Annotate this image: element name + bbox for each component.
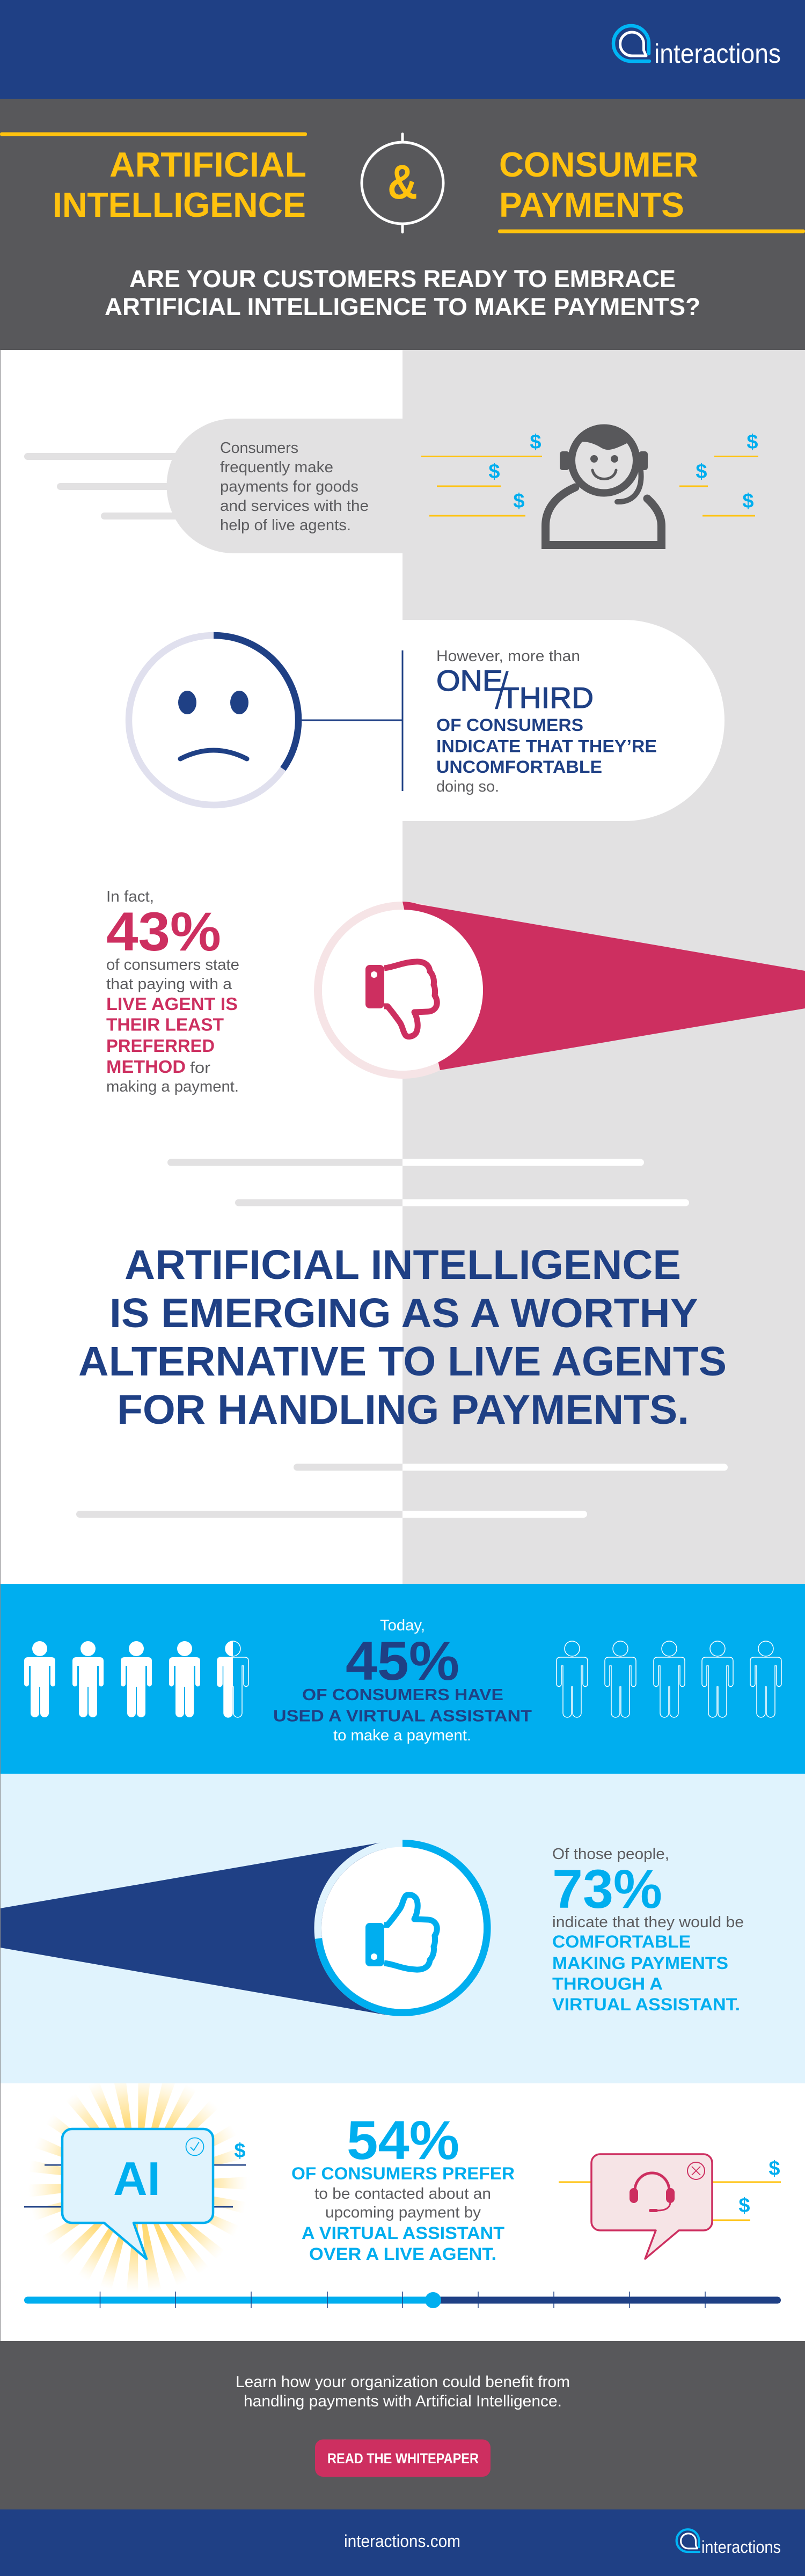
headline: AI as worthy alternative: FOR HANDLING PAYMENTS. [117, 1387, 689, 1433]
title: artificial intelligence: INTELLIGENCE [53, 185, 306, 224]
text: 43 percent: for [190, 1059, 210, 1077]
icon: live agent with headset [545, 427, 661, 545]
text: 54 percent: OF CONSUMERS PREFER [291, 2164, 515, 2183]
top header band [0, 0, 805, 99]
text: 54 percent: upcoming payment by [325, 2204, 481, 2221]
text: however more than one third: THIRD [501, 681, 594, 714]
text: 54 percent: to be contacted about an [314, 2185, 491, 2202]
website link: interactions.com [344, 2531, 460, 2551]
text: consumers frequently make payments: payments for goods [220, 478, 358, 495]
text: 43 percent: METHOD [106, 1057, 186, 1077]
text: 43 percent: of consumers state [106, 956, 239, 974]
text: 73 percent: VIRTUAL ASSISTANT. [552, 1995, 740, 2014]
text: 54 percent: A VIRTUAL ASSISTANT [302, 2223, 504, 2243]
text: consumers frequently make payments: and services with the [220, 497, 369, 515]
text: however more than one third: UNCOMFORTABLE [436, 757, 602, 777]
subtitle question: ARE YOUR CUSTOMERS READY TO EMBRACE [129, 265, 676, 292]
title band [0, 99, 805, 350]
text: 45 percent: USED A VIRTUAL ASSISTANT [273, 1707, 532, 1725]
subtitle question: ARTIFICIAL INTELLIGENCE TO MAKE PAYMENTS? [105, 293, 700, 320]
title: artificial intelligence: ARTIFICIAL [109, 145, 306, 184]
text: learn how: handling payments with Artificial Intelligence. [244, 2392, 562, 2410]
logo: interactions: interactions [654, 39, 781, 69]
right yellow rule [498, 230, 805, 233]
bottom footer band [0, 2509, 805, 2576]
title: consumer payments: PAYMENTS [499, 185, 684, 224]
icon: AI speech bubble [24, 2129, 246, 2259]
logo: interactions small: interactions [701, 2537, 781, 2557]
icon: sad face with progress ring [129, 635, 298, 805]
text: 45 percent: Today, [380, 1617, 425, 1634]
text: however more than one third: OF CONSUMERS [436, 715, 583, 735]
title: consumer payments: CONSUMER [499, 145, 698, 184]
text: 43 percent: THEIR LEAST [106, 1014, 224, 1035]
text: consumers frequently make payments [220, 440, 369, 534]
text: however more than one third: doing so. [436, 778, 499, 795]
logo: interactions small [677, 2529, 781, 2557]
dollar signs: $ [696, 460, 707, 483]
icon: thumbs up in cone [0, 1842, 487, 2015]
text: 73 percent [552, 1846, 744, 2014]
text: 73 percent: THROUGH A [552, 1974, 663, 1993]
connector lines [302, 650, 404, 791]
icon row: filled people [24, 1641, 248, 1717]
dollar signs: $ [530, 431, 541, 453]
text: learn how: Learn how your organization could benefit from [236, 2373, 570, 2391]
text: 73 percent: MAKING PAYMENTS [552, 1953, 728, 1973]
icon: thumbs down in cone [318, 902, 805, 1074]
text: 43 percent [106, 888, 239, 1095]
panel: 73 percent comfortable [0, 1774, 805, 2083]
headline: AI as worthy alternative: ARTIFICIAL INTELLIGENCE [125, 1242, 681, 1288]
dollar signs: $ [488, 460, 500, 483]
headline: AI as worthy alternative: IS EMERGING AS A WORTHY [109, 1290, 698, 1336]
panel: sunburst backdrop for AI bubble [33, 2083, 243, 2288]
icon: live agent speech bubble: $ [769, 2157, 780, 2180]
text: 73 percent: indicate that they would be [552, 1914, 744, 1931]
text: 43 percent: making a payment. [106, 1078, 239, 1095]
title: artificial intelligence [53, 145, 306, 224]
headline: AI as worthy alternative: ALTERNATIVE TO LIVE AGENTS [78, 1338, 727, 1385]
text: learn how [236, 2373, 570, 2410]
text: 43 percent: PREFERRED [106, 1036, 215, 1056]
text: however more than one third: However, more than [436, 648, 580, 665]
text: 45 percent: to make a payment. [333, 1727, 471, 1744]
dollar signs [488, 431, 758, 513]
icon: live agent speech bubble: $ [738, 2194, 750, 2217]
dollar signs: $ [742, 490, 754, 513]
text: 43 percent: LIVE AGENT IS [106, 994, 238, 1014]
text: 45 percent: 45% [346, 1630, 459, 1692]
left yellow rule [0, 132, 307, 136]
text: however more than one third [436, 648, 657, 795]
text: 73 percent: 73% [552, 1858, 662, 1920]
text: however more than one third: INDICATE THAT THEY’RE [436, 736, 657, 756]
button: read the whitepaper [315, 2440, 491, 2477]
icon: live agent speech bubble [559, 2154, 781, 2259]
yellow payment lines [421, 456, 758, 516]
panel: 54 percent prefer virtual assistant [24, 2110, 781, 2308]
progress slider [24, 2292, 781, 2308]
speed lines [24, 453, 187, 519]
horizontal bars below headline [76, 1464, 728, 1518]
split background panel [0, 350, 805, 1584]
icon: AI speech bubble: $ [234, 2140, 246, 2162]
text: 45 percent [273, 1617, 532, 1744]
text: consumers frequently make payments: help of live agents. [220, 517, 351, 534]
text: 73 percent: Of those people, [552, 1846, 669, 1863]
text: 54 percent: OVER A LIVE AGENT. [309, 2244, 496, 2264]
panel: one third uncomfortable [129, 620, 724, 821]
panel: 45 percent used virtual assistant [0, 1584, 805, 1774]
ampersand badge: & [387, 156, 418, 209]
horizontal bars above headline [167, 1159, 689, 1206]
logo: interactions [613, 26, 781, 69]
title: consumer payments [499, 145, 698, 224]
text: 73 percent: COMFORTABLE [552, 1932, 691, 1951]
button: read the whitepaper: READ THE WHITEPAPER [327, 2450, 479, 2467]
text: 43 percent: that paying with a [106, 976, 232, 993]
text: 54 percent [291, 2110, 515, 2264]
text: 54 percent: 54% [347, 2110, 459, 2171]
footer call to action band [0, 2341, 805, 2509]
dollar signs: $ [513, 490, 525, 513]
grey pill [166, 419, 402, 553]
white pill [402, 620, 724, 821]
icon row: outlined people [557, 1641, 781, 1717]
text: consumers frequently make payments: Consumers [220, 440, 298, 457]
icon: AI speech bubble: AI [113, 2152, 160, 2205]
ampersand badge [362, 133, 443, 233]
panel: 43 percent least preferred [106, 888, 805, 1095]
subtitle question [105, 265, 700, 320]
text: however more than one third: ONE [436, 664, 503, 697]
text: 45 percent: OF CONSUMERS HAVE [302, 1685, 503, 1704]
panel: live agents [24, 419, 758, 553]
text: however more than one third: / [494, 661, 510, 721]
dollar signs: $ [747, 431, 758, 453]
text: 43 percent: 43% [106, 901, 221, 962]
text: consumers frequently make payments: frequently make [220, 459, 333, 476]
text: 43 percent: In fact, [106, 888, 154, 905]
headline: AI as worthy alternative [78, 1242, 727, 1433]
